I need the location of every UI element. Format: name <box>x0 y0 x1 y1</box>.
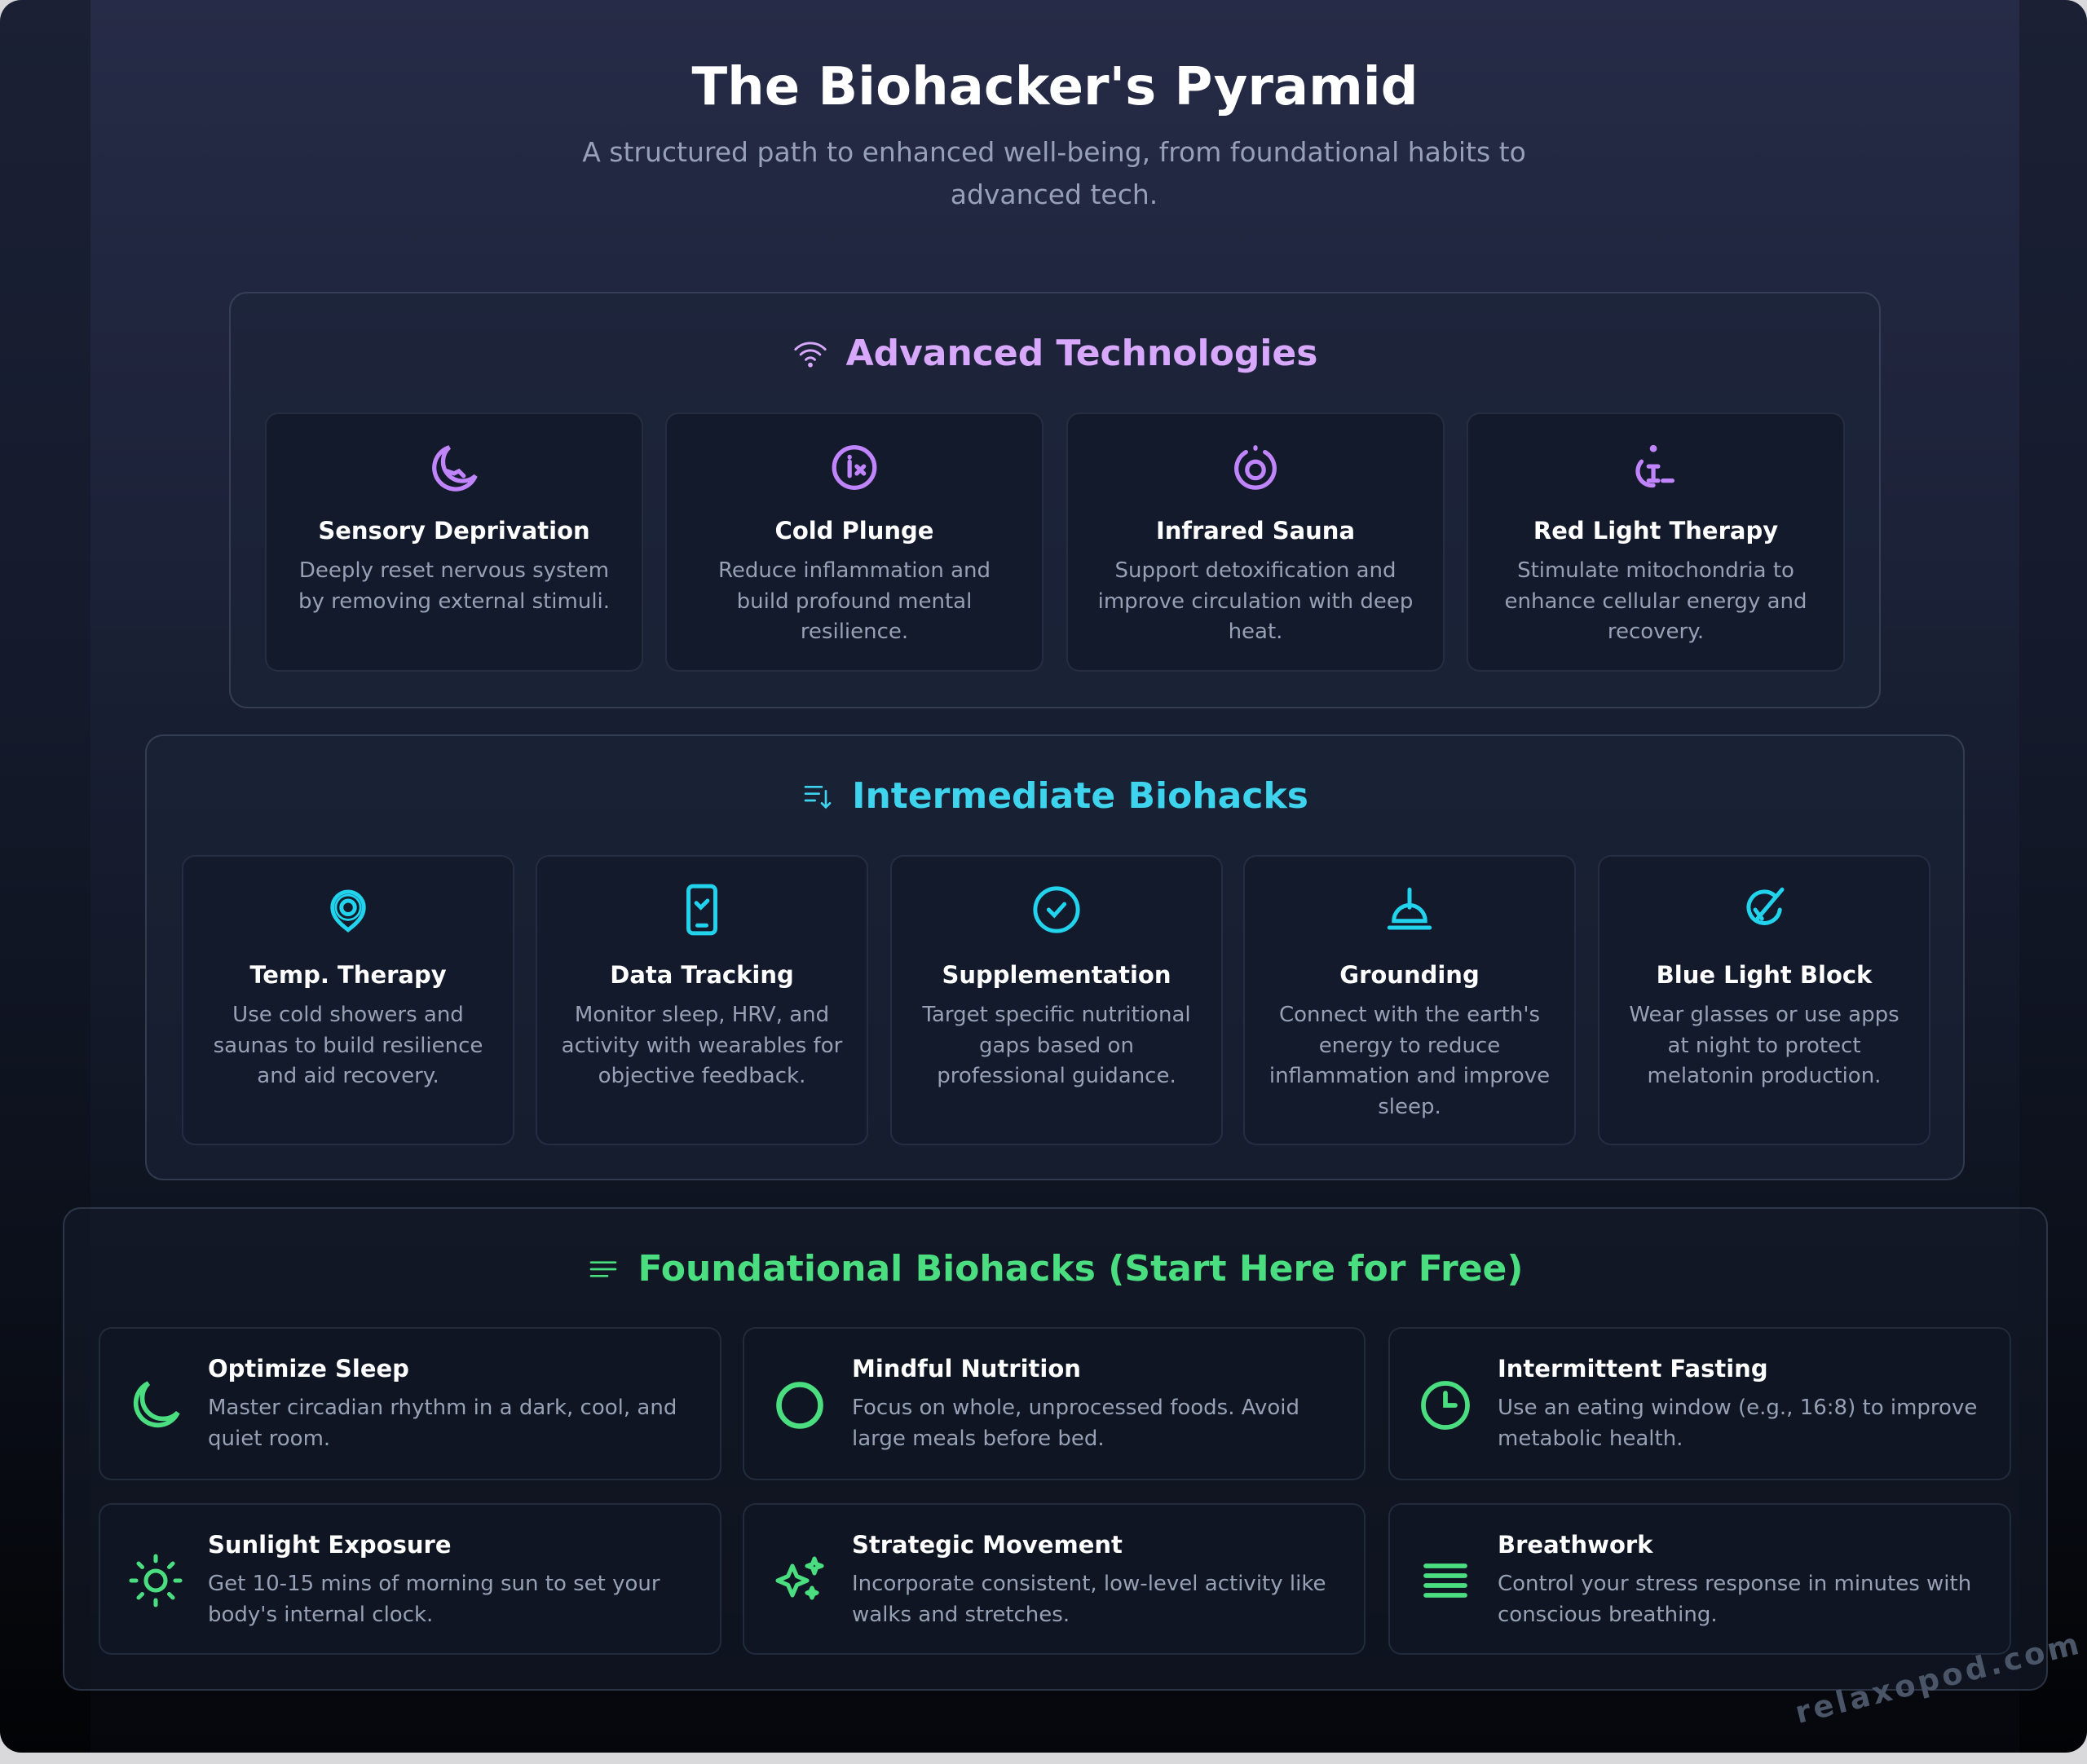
icon: circle <box>776 1382 823 1429</box>
card: mindful nutrition: Mindful Nutrition <box>852 1355 1081 1383</box>
card: blue light block: Wear glasses or use apps at night to protect melatonin production. <box>1629 1003 1899 1088</box>
card: sunlight exposure <box>99 1503 721 1655</box>
icon: lines <box>1423 1563 1467 1598</box>
subtitle: A structured path to enhanced well-being, from foundational habits to advanced tech. <box>582 136 1526 210</box>
card: intermittent fasting: Use an eating window (e.g., 16:8) to improve metabolic health. <box>1498 1396 1977 1451</box>
icon: check circle <box>1033 886 1080 933</box>
card: sensory deprivation: Deeply reset nervous system by removing external stimuli. <box>298 558 610 613</box>
watermark: relaxopod.com <box>1792 1625 2085 1731</box>
card: supplementation: Supplementation <box>942 961 1171 989</box>
card: grounding: Grounding <box>1339 961 1480 989</box>
icon: clock <box>1421 1381 1470 1430</box>
card: optimize sleep: Master circadian rhythm in a dark, cool, and quiet room. <box>208 1396 677 1451</box>
card: strategic movement: Incorporate consistent, low-level activity like walks and stretches. <box>852 1572 1326 1627</box>
heading: foundational: Foundational Biohacks (Start Here for Free) <box>638 1248 1524 1290</box>
card: data tracking: Monitor sleep, HRV, and activity with wearables for objective feedback. <box>562 1003 842 1088</box>
card: mindful nutrition: Focus on whole, unprocessed foods. Avoid large meals before bed. <box>852 1396 1299 1451</box>
icon: sauna <box>1234 445 1277 490</box>
card: sensory deprivation <box>265 412 643 672</box>
panel: intermediate biohacks <box>145 734 1965 1180</box>
icon: moon float <box>432 445 478 492</box>
icon: sun <box>129 1554 183 1607</box>
card: mindful nutrition <box>743 1327 1366 1480</box>
icon: cold plunge <box>832 445 877 490</box>
card: breathwork: Control your stress response in minutes with conscious breathing. <box>1498 1572 1971 1627</box>
card: supplementation: Target specific nutritional gaps based on professional guidance. <box>922 1003 1191 1088</box>
card: cold plunge: Cold Plunge <box>775 517 933 545</box>
card: grounding: Connect with the earth's energy to reduce inflammation and improve sleep. <box>1269 1003 1550 1118</box>
card: infrared sauna: Infrared Sauna <box>1156 517 1355 545</box>
icon: temp <box>330 890 366 933</box>
card: temp therapy: Use cold showers and saunas to build resilience and aid recovery. <box>214 1003 483 1088</box>
card: data tracking: Data Tracking <box>610 961 794 989</box>
card: blue light block: Blue Light Block <box>1657 961 1872 989</box>
card: intermittent fasting <box>1388 1327 2011 1480</box>
card: infrared sauna <box>1066 412 1445 672</box>
card: sunlight exposure: Sunlight Exposure <box>208 1531 452 1559</box>
icon: phone <box>686 884 717 936</box>
card: optimize sleep: Optimize Sleep <box>208 1355 409 1383</box>
panel: foundational biohacks <box>63 1207 2048 1691</box>
card: data tracking <box>536 855 868 1145</box>
icon: blocked <box>1746 887 1784 925</box>
card: sensory deprivation: Sensory Deprivation <box>318 517 590 545</box>
card: blue light block <box>1598 855 1930 1145</box>
card: cold plunge: Reduce inflammation and build profound mental resilience. <box>718 558 991 644</box>
heading: intermediate: Intermediate Biohacks <box>852 775 1308 817</box>
card: optimize sleep <box>99 1327 721 1480</box>
panel: advanced technologies <box>229 292 1881 708</box>
card: infrared sauna: Support detoxification and improve circulation with deep heat. <box>1098 558 1413 644</box>
card: red light therapy: Stimulate mitochondria to enhance cellular energy and recovery. <box>1504 558 1807 644</box>
icon: ground <box>1388 887 1432 929</box>
card: red light therapy <box>1467 412 1845 672</box>
card: red light therapy: Red Light Therapy <box>1533 517 1778 545</box>
icon: moon <box>134 1381 179 1428</box>
card: breathwork <box>1388 1503 2011 1655</box>
card: temp therapy <box>182 855 514 1145</box>
card: sunlight exposure: Get 10-15 mins of morning sun to set your body's internal clock. <box>208 1572 660 1627</box>
card: cold plunge <box>665 412 1044 672</box>
card: temp therapy: Temp. Therapy <box>249 961 447 989</box>
card: strategic movement: Strategic Movement <box>852 1531 1123 1559</box>
icon: red light <box>1635 445 1674 487</box>
card: supplementation <box>890 855 1223 1145</box>
heading: advanced technologies: Advanced Technologies <box>846 333 1317 374</box>
title: The Biohacker's Pyramid <box>691 57 1419 117</box>
card: intermittent fasting: Intermittent Fasting <box>1498 1355 1768 1383</box>
card: breathwork: Breathwork <box>1498 1531 1652 1559</box>
icon: sparkles <box>776 1557 823 1599</box>
card: strategic movement <box>743 1503 1366 1655</box>
card: grounding <box>1243 855 1576 1145</box>
